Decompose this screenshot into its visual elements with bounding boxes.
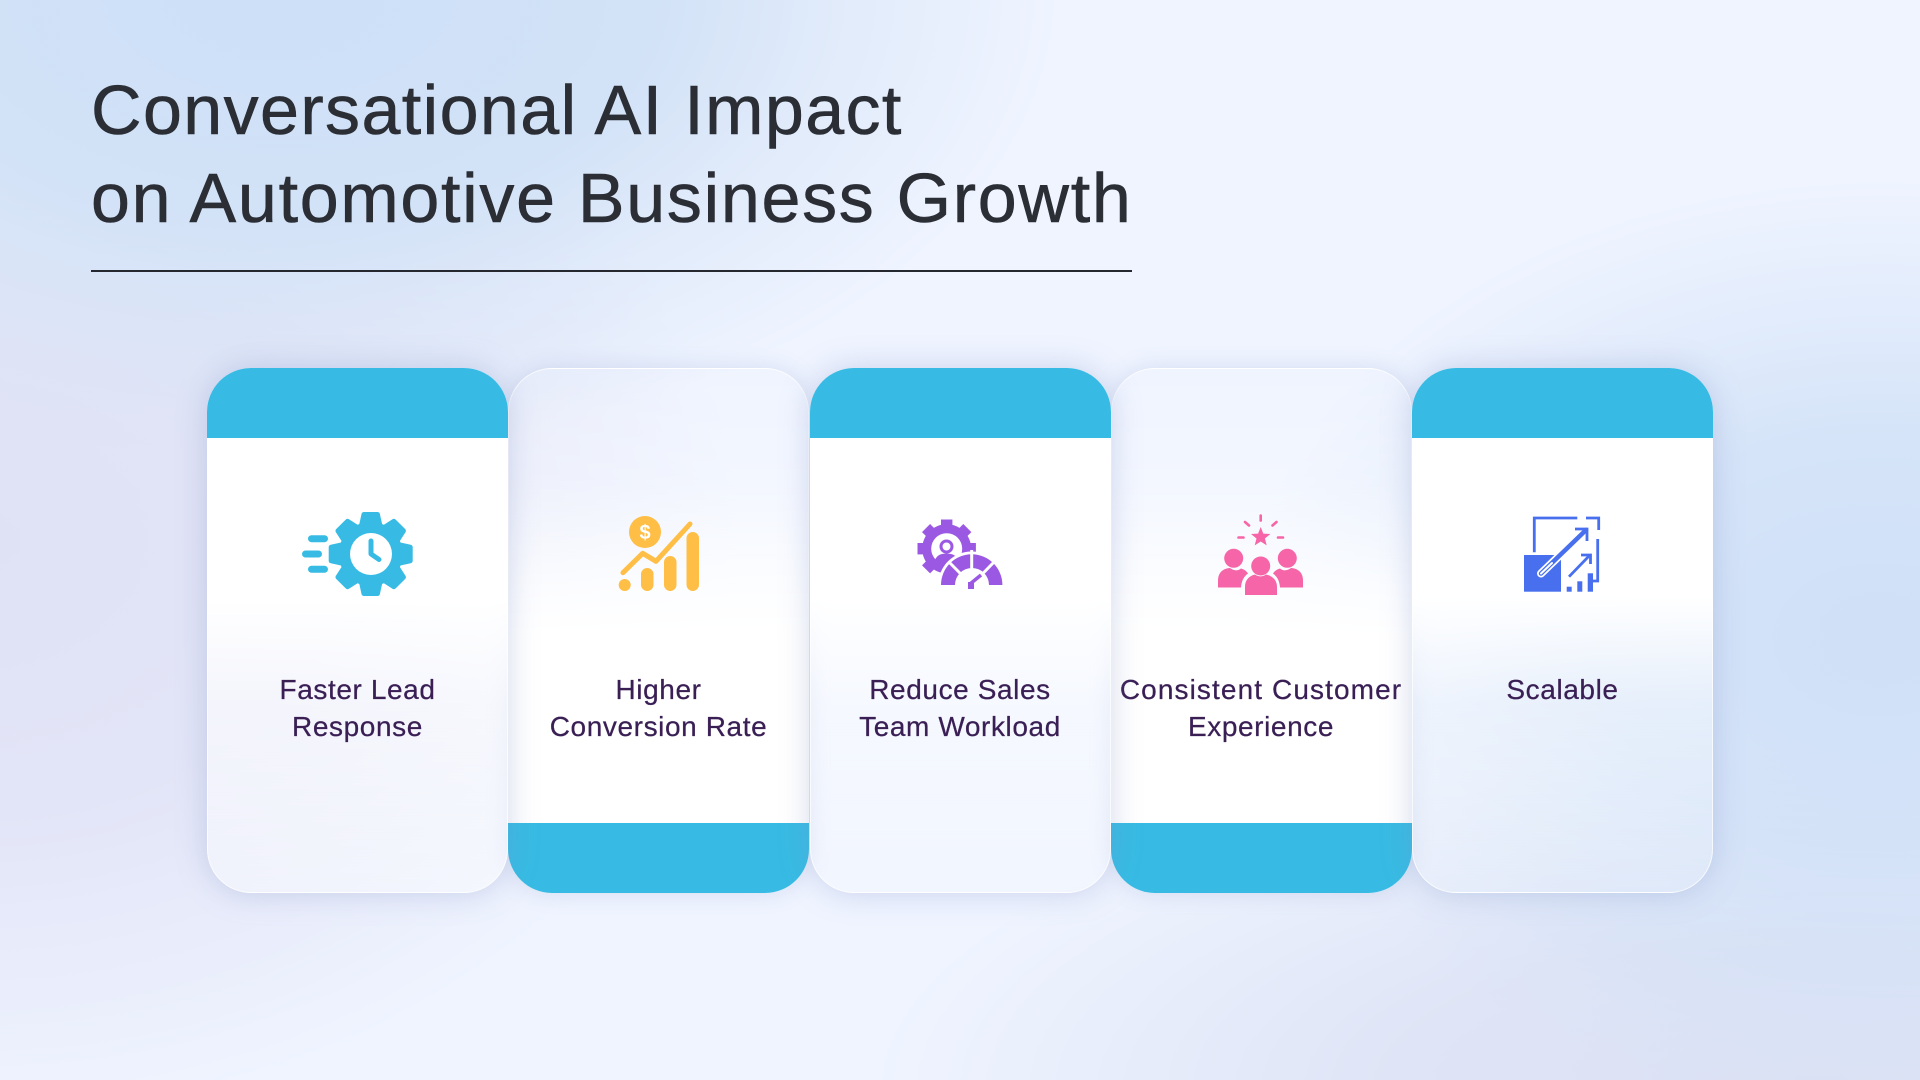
label: Scalable (1506, 674, 1619, 705)
panel: scalable (1412, 368, 1713, 893)
title: on Automotive Business Growth (91, 159, 1132, 237)
panel: consistent customer experience (1110, 368, 1412, 893)
top band (207, 368, 508, 438)
label: Consistent Customer (1120, 674, 1402, 705)
bottom band (508, 823, 809, 893)
icon: gear with clock (302, 512, 413, 596)
title underline (91, 270, 1132, 272)
label (859, 674, 1061, 742)
top band (810, 368, 1110, 438)
label: Faster Lead (279, 674, 436, 705)
icon: coin and rising bars: $ (639, 522, 651, 544)
label: Higher (615, 674, 702, 705)
panel: faster lead response (207, 368, 508, 893)
label: Response (292, 711, 423, 742)
panel: higher conversion rate (508, 368, 809, 893)
title (91, 71, 1132, 237)
icon: team with star (1218, 514, 1303, 595)
panel: reduce sales team workload (810, 368, 1110, 893)
label: Team Workload (859, 711, 1061, 742)
label (279, 674, 436, 742)
label (1120, 674, 1402, 742)
label (550, 674, 767, 742)
label: Experience (1188, 711, 1334, 742)
icon: scaling square with arrows (1524, 516, 1600, 592)
bottom band (1110, 823, 1412, 893)
label: Reduce Sales (869, 674, 1051, 705)
icon: coin and rising bars (618, 516, 699, 591)
label: Conversion Rate (550, 711, 767, 742)
top band (1412, 368, 1713, 438)
title: Conversational AI Impact (91, 71, 903, 149)
icon: gear with person and gauge (918, 520, 1002, 589)
